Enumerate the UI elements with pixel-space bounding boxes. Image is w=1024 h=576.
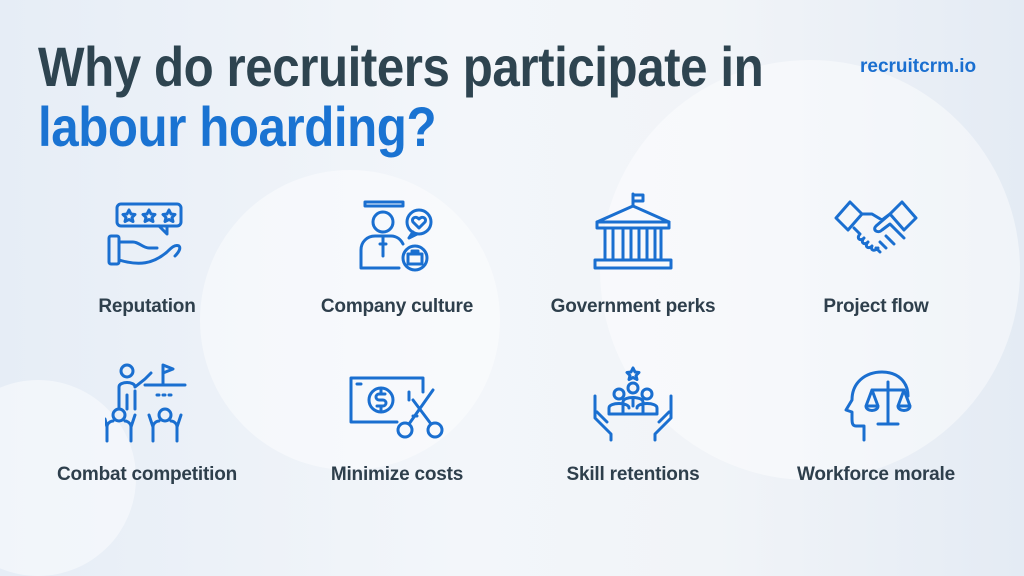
item: reputation: Reputation	[98, 296, 196, 317]
title	[38, 35, 763, 158]
text: Why do recruiters participate in	[38, 35, 763, 98]
item: skill retentions: Skill retentions	[566, 464, 700, 485]
icon: government building	[594, 192, 672, 270]
icon: hands holding team	[594, 366, 672, 442]
item: company culture	[321, 200, 473, 317]
item: workforce morale: Workforce morale	[797, 464, 955, 485]
item: project flow	[823, 200, 929, 317]
icon: cut banknote	[350, 376, 444, 438]
icon: head with scales	[844, 370, 912, 442]
item: workforce morale	[797, 370, 955, 485]
item: government perks	[551, 192, 715, 317]
icon: handshake	[834, 200, 918, 254]
icon: people with flag	[105, 364, 186, 442]
text: labour hoarding?	[38, 95, 436, 158]
item: reputation	[98, 202, 196, 317]
icon: hand with stars	[108, 202, 182, 266]
item: government perks: Government perks	[551, 296, 715, 317]
item: minimize costs: Minimize costs	[331, 464, 463, 485]
icon: person with heart and briefcase	[360, 200, 432, 272]
item: combat competition	[57, 364, 237, 485]
item: company culture: Company culture	[321, 296, 473, 317]
item: minimize costs	[331, 376, 463, 485]
item: combat competition: Combat competition	[57, 464, 237, 485]
item: project flow: Project flow	[823, 296, 929, 317]
item: skill retentions	[566, 366, 700, 485]
logo: recruitcrm.io	[860, 56, 976, 77]
